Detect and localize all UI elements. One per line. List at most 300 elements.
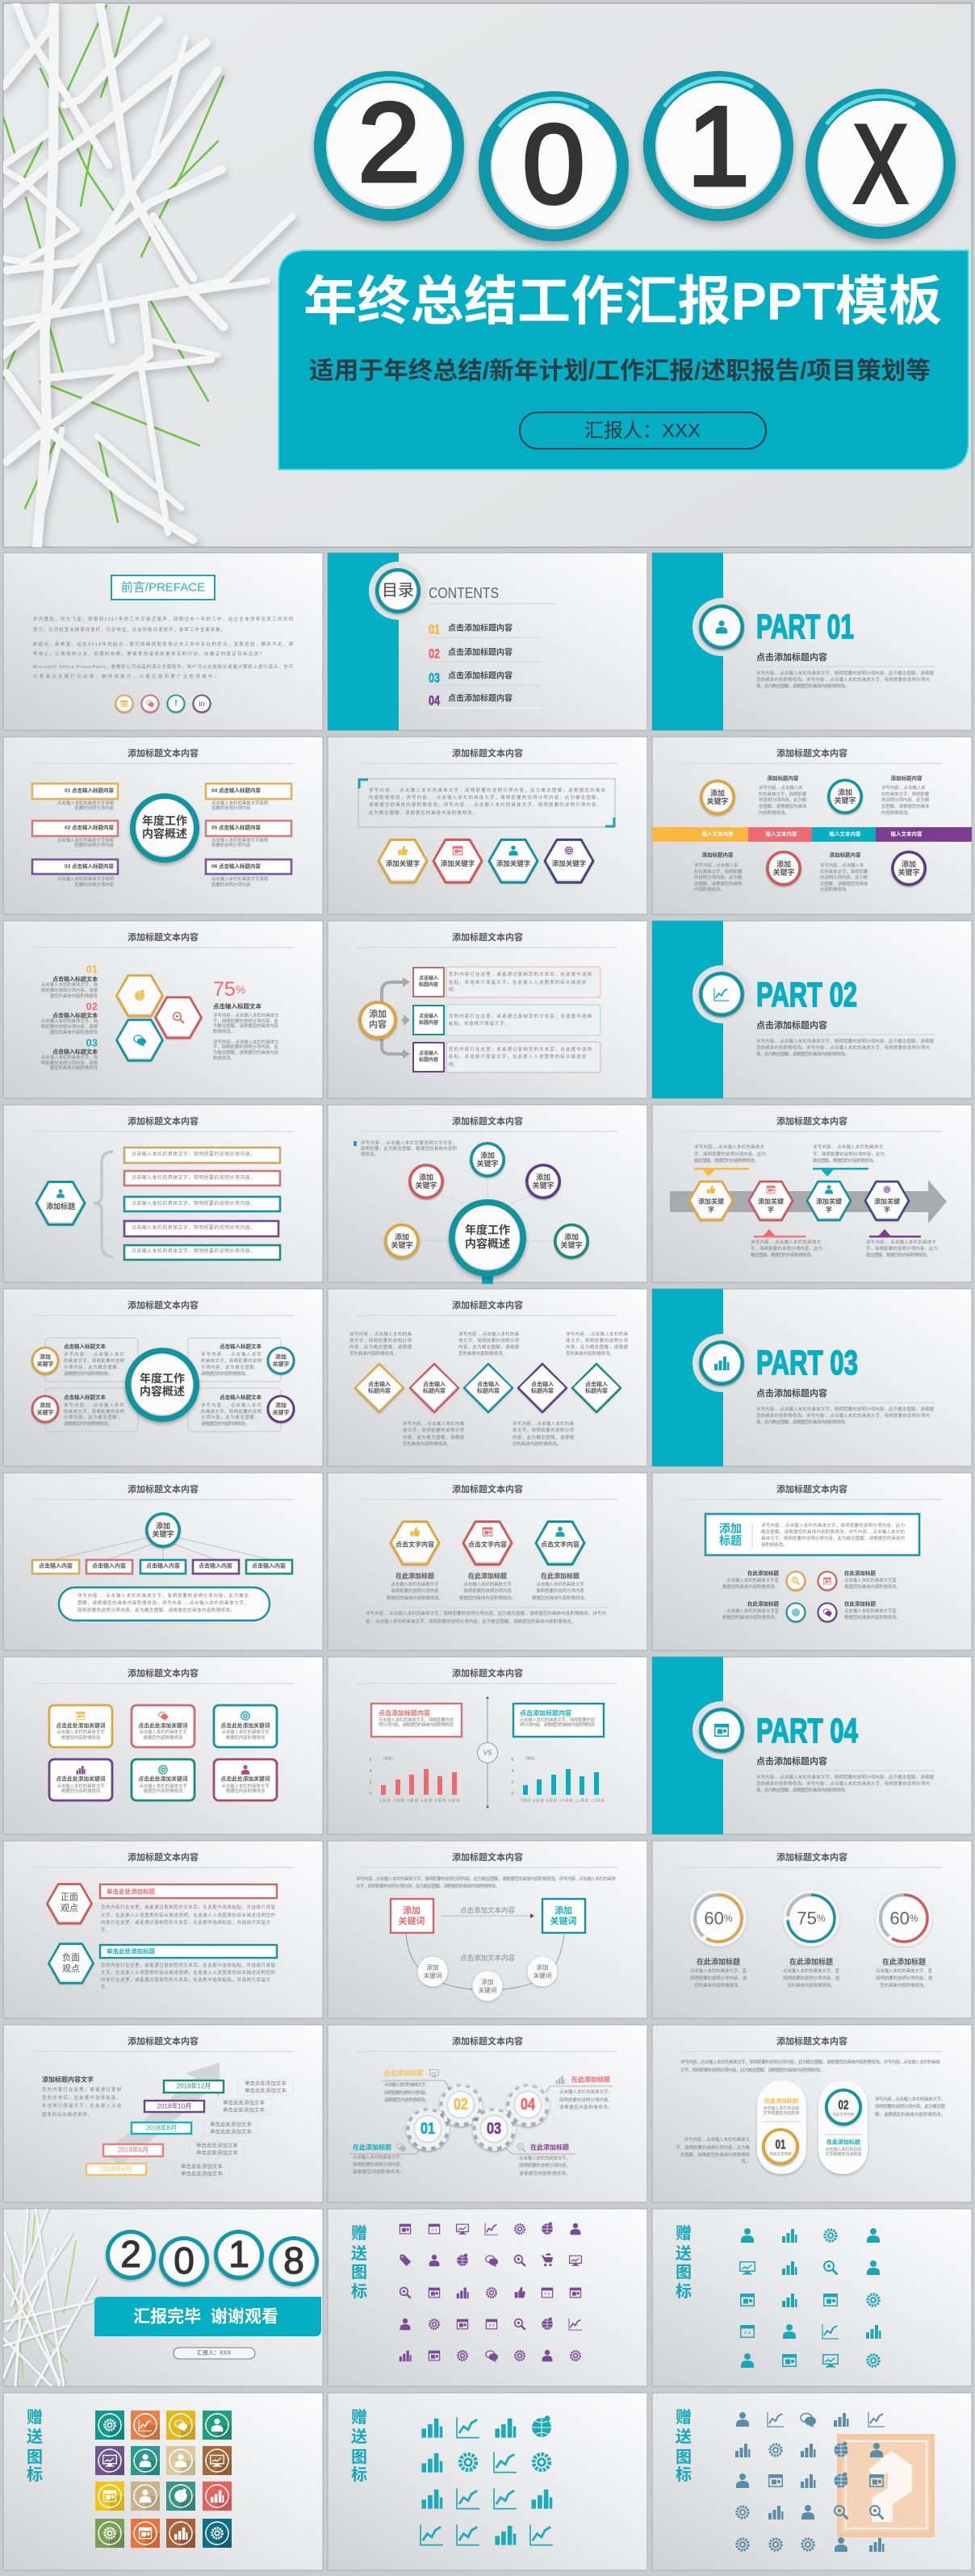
quadrant lower right: 请根据您的内容酌情修改。 [201,1420,249,1427]
part text: 详写内容....点击输入本栏的具体文字，简明扼要的说明分项内容，此为概念图解，请根据 [756,1038,935,1044]
vertical heading: 图 [676,2448,692,2466]
text column top 1: 详写内容....点击输入本 [759,784,803,791]
list row 4 [124,1221,278,1236]
hexagon keyword 3 [489,839,538,884]
diamond 5 [572,1364,621,1414]
left item 01: 扼要的说明分项内容 [74,805,115,811]
slide title: 添加标题文本内容 [128,1483,199,1495]
left item 02: 点击输入标题文本 [52,1012,98,1018]
hexagon column 2: 简明扼要的说明分项内容 [463,1587,512,1594]
top ring [145,1512,181,1549]
top text 2: 体文字，简明扼要的说明分项 [458,1337,520,1344]
hexagon keyword 4: 添加关键字 [552,859,586,868]
gauge 75 label: 在此添加标题 [789,1957,833,1966]
step 2018年10月 [144,2098,271,2114]
right bar chart: （单位） [523,1756,538,1761]
left text: 您的内容打在这里，或者通过复制 [42,2086,121,2093]
gauge red label [876,1957,933,1988]
slide: branching content boxes [328,921,647,1098]
bottom note 1 [751,1229,822,1258]
diamond 3: 标题内容 [477,1386,500,1395]
negative text [101,1962,275,1990]
band segments: 输入文本内容 [891,830,923,838]
social icons: in [199,700,205,708]
top text: 文字，简明扼要的说明分项内容，此为概念图解，请根据您的具体内容酌情修改。 [680,2067,824,2073]
slide: org tree [3,1473,323,1650]
left item 03: 点击输入标题文本 [52,1048,98,1056]
slide title: 添加标题文本内容 [452,1851,523,1863]
slide title: 添加标题文本内容 [452,2035,523,2047]
right item 05 [206,821,291,848]
left box: 点击输入本栏的具体文字，简明扼要的说 [379,1717,454,1723]
hexagon step 2: 添加关键 [758,1198,784,1206]
cycle circle left [417,1956,448,1988]
item upper right: 在此添加标题 [844,1569,877,1577]
centre ring: 年度工作 [465,1223,510,1236]
item upper left: 点击输入本栏的具体文字直 [726,1577,780,1583]
card 6: 根据您内容酌情修改 [226,1788,266,1794]
left bar chart: 1月份 2月份 3月份 4月份 5月份 6月份 [379,1798,460,1803]
centre ring [130,793,199,865]
part text: 您的具体内容酌情修改。详写内容....点击输入本栏的具体文字，简明扼要的说明分项内 [756,1412,930,1419]
callout lower right [517,2143,571,2177]
item lower left: 点击输入本栏的具体文字直 [726,1608,780,1614]
callout upper right [556,2076,613,2110]
text column top 1 [759,775,807,816]
VS axis [478,1696,497,1808]
quadrant upper right: 详写内容....点击输入本栏 [201,1351,262,1357]
negative hexagon: 观点 [62,1963,80,1974]
text pill: 图解，请根据您的具体内容酌情修改。详写内容....点击输入本栏的具体文字， [77,1600,249,1606]
framed text block [358,779,615,827]
bottom note 2: 字，简明扼要的说明分项内容，此为 [866,1245,938,1252]
band segments: 输入文本内容 [765,830,797,838]
left item 02: 点击输入本栏的具体文字，简 [41,1018,98,1024]
left item 01: 点击输入本栏的具体文字简明 [57,800,114,806]
diamond 1: 标题内容 [368,1386,391,1395]
part heading: PART 03 [756,1344,858,1382]
card 2 [132,1705,195,1747]
slide: radial keywords [328,1105,647,1284]
list row 1 [124,1148,280,1163]
vertical heading: 图 [676,2264,692,2281]
keyword top: 关键字 [476,1159,499,1168]
right keyword box: 关键词 [550,1915,576,1926]
right text: 点击输入标题文本 [213,1002,262,1010]
left item 01: 据您的具体内容酌情修改 [50,993,98,999]
keyword top [470,1142,505,1178]
vertical heading: 送 [676,2428,692,2446]
slide title: 添加标题文本内容 [452,931,523,943]
hexagon column 3: 根据您的具体内容酌情修改。 [532,1595,588,1601]
step 2018年12月 [164,2079,293,2095]
right item 06: 06 点击输入标题内容 [211,862,262,870]
tree box 4 [193,1560,239,1574]
card 4: 点击此处添加关键词 [56,1775,106,1782]
slide title: 添加标题文本内容 [452,1115,523,1127]
top text 3: 内容，此为概念图解，请根据 [566,1344,629,1350]
gear 02 [439,2085,483,2128]
right item 04: 扼要的说明分项内容 [211,805,251,811]
part text: 容，此为概念图解，请根据您的具体内容酌情修改。 [756,683,849,689]
bottom text 1: 内容，此为概念图解，请根据 [403,1434,465,1441]
row 1 [413,967,600,997]
right keyword box: 添加 [554,1905,572,1916]
hexagon keyword 2 [433,839,482,884]
item upper left [722,1569,806,1591]
digit circle 2: 2 [120,2233,141,2275]
left item 02: 02 点击输入标题内容 [65,823,114,831]
keyword lower right: 关键字 [560,1240,583,1249]
right text: 详写内容....点击输入本栏的具体文 [213,1039,279,1045]
step 2018年10月: 单击此处添加文本 [223,2098,265,2106]
right box: 点击输入本栏的具体文字，简明扼要的说 [520,1717,596,1723]
top text: 详写内容....点击输入本栏的具体文字，简明扼要的说明分项内容，此为概念图解，请根据您的具体内容酌情修改。详写内容....点击输入本栏的具体 [356,1876,617,1882]
slide: chart icons [328,2393,647,2570]
thank you banner [94,2297,321,2336]
diamond 1 [355,1364,404,1414]
right text: 详写内容....点击输入本栏的具体文 [213,1012,279,1018]
vertical heading: 赠 [351,2408,367,2427]
tree box 5 [246,1560,292,1574]
hexagon step 1 [689,1181,733,1221]
vertical heading: 送 [351,2244,367,2263]
text column top 2: 添加标题内容 [891,775,923,781]
slide: colour band timeline [652,737,972,914]
part heading: PART 04 [756,1712,858,1750]
quadrant upper right: 的具体文字，简明扼要的说明 [201,1357,262,1364]
diamond 4: 点击输入 [531,1380,554,1388]
left item 02 [41,1001,98,1035]
teal side band [652,921,723,1098]
top text 3: 您的具体内容酌情修改。 [566,1350,614,1357]
left text: 图表的综合描述说明。 [42,2111,92,2118]
gauge 75 label: 您的具体内容酌情修改。 [787,1982,835,1988]
left item 02: 明扼要的说明分项内容，请根 [41,1023,98,1030]
list row 3 [124,1197,280,1211]
part text [756,1406,935,1425]
text column bottom 2: 添加标题内容 [830,851,861,859]
bottom note 2: 概念图解，根据您的内容酌情修改。 [866,1252,931,1258]
digit circle X: X [854,102,907,225]
step 2018年8月: 2018年8月 [146,2124,177,2132]
keyword lower left: 添加 [395,1232,409,1241]
part text [756,1774,935,1793]
negative hexagon [48,1944,94,1984]
top text 3: 体文字，简明扼要的说明分项 [566,1337,629,1344]
right text: 酌情修改。 [213,1055,235,1061]
gear 04: 04 [521,2096,536,2114]
gauge red label: 在此添加标题 [882,1957,926,1966]
right pill: 在此添加标题 [826,2139,860,2145]
cycle arc [406,1933,564,1990]
quadrant lower left: 添加 [40,1401,51,1409]
left pill: 文字根据您内容酌情 [763,2110,800,2116]
keyword circle top 1 [700,780,735,816]
quadrant upper left: 的具体文字，简明扼要的说明 [64,1357,124,1364]
quadrant lower right: 的具体文字，简明扼要的说明 [201,1408,262,1415]
heading box [705,1514,919,1555]
step 2018年8月 [132,2121,258,2136]
callout lower right: 在此添加标题 [530,2143,569,2152]
left bar chart: 6 [370,1758,371,1763]
diamond 1: 点击输入 [368,1380,391,1388]
quadrant upper right: 添加 [275,1353,287,1361]
top text 1: 内容，此为概念图解，请根据 [349,1344,412,1350]
step 2018年4月: 2018年4月 [101,2164,132,2172]
list row 3: 点击输入本栏的具体文字，简明扼要的说明分项内容。 [132,1200,255,1206]
callout lower right: 点击输入本栏的具体文字， [519,2155,571,2161]
heading box: 具体文字，简明扼要的说明分项内容，此为概念图解，请根据您的具体内 [761,1535,905,1541]
right bar chart: 4 [512,1769,513,1774]
tree box 3 [140,1560,186,1574]
heading box: 添加 [719,1522,742,1535]
text column bottom 1: 栏的具体文字，简明扼要 [694,868,743,875]
slide title: 添加标题文本内容 [128,1851,199,1863]
slide: preface [3,553,323,730]
slide: VS comparison charts [328,1657,647,1834]
row 3: 您的内容打在这里，或者通过复制您的文本后，在此框中选择 [449,1046,592,1052]
positive heading box [100,1884,277,1898]
callout upper left: 在此添加标题 [384,2069,423,2077]
bottom note 1: 详写内容....点击输入本栏的具体文 [751,1239,822,1245]
branch arrows [382,977,410,1059]
quadrant upper right [201,1343,295,1377]
vertical heading [351,2224,367,2301]
framed text block: 详写内容....点击输入本栏的具体文字，简明扼要的说明分项内容，此为概念图解，请根据您的具体 [369,787,606,793]
quadrant lower right [201,1393,295,1427]
item upper right: 点击输入本栏的具体文字直 [844,1577,897,1583]
outlined boxes [45,1338,281,1432]
left item 01 [32,784,118,811]
card 1 [49,1705,112,1747]
quadrant lower left: 分项内容，此为概念图解， [64,1414,122,1420]
card 4: 根据您内容酌情修改 [61,1788,101,1794]
top text 1: 您的具体内容酌情修改。 [349,1350,398,1357]
cycle circle left: 添加 [426,1963,439,1971]
gauge 60 label [690,1957,747,1988]
top text 2: 详写内容....点击输入本栏的具 [458,1331,520,1337]
gear 03: 03 [487,2120,501,2138]
vertical heading: 送 [351,2428,367,2446]
presenter pill [174,2348,255,2359]
keyword circle top 2: 添加 [838,788,852,797]
slide: steel icons with stamp [652,2393,972,2570]
top note 1 [694,1144,766,1177]
keyword upper left [408,1164,444,1200]
quadrant lower right: 添加 [275,1401,287,1409]
hexagon column 1: 根据您的具体内容酌情修改。 [387,1595,443,1601]
slide title: 添加标题文本内容 [776,1115,847,1127]
keyword circle bottom 2: 添加 [902,859,916,868]
diamond 3 [464,1364,513,1414]
left item 01: 点击输入本栏的具体文字，简 [41,981,98,988]
right item 06 [206,859,291,888]
right text: 为概念图解，请根据您的具体内容 [213,1049,278,1056]
quadrant upper left: 点击输入标题文本 [64,1343,107,1349]
diagonal arrow [104,2063,220,2166]
callout lower left: 请根据您内容酌情修改。 [353,2168,404,2175]
right pill: 点击输入本栏的具体 [825,2147,862,2152]
card 6: 点击此处添加关键词 [220,1775,270,1782]
part subtitle: 点击添加标题内容 [756,1019,827,1031]
callout lower left: 简明扼要的说明分项内容， [353,2161,404,2168]
social icons [115,694,211,713]
badge grid [95,2411,232,2548]
top note 2 [813,1144,885,1177]
item lower left [722,1600,806,1623]
bottom text 2 [513,1420,575,1447]
teal side band [652,1657,723,1834]
slide: two pills [652,2025,972,2202]
hexagon column 1: 点击输入本栏的具体文字 [391,1581,439,1587]
grey arrow [670,1180,947,1223]
row 1: 标题内容 [419,981,438,988]
slide: stepped timeline [3,2025,323,2202]
thank you banner: 汇报完毕 谢谢观看 [133,2306,278,2326]
hexagon column 2: 在此添加标题 [468,1572,507,1580]
slide title: 添加标题文本内容 [776,1851,847,1863]
row 3: 明。 [449,1062,458,1068]
vertical heading: 标 [676,2465,692,2484]
left bar chart: （单位） [381,1756,395,1761]
hexagon column 1: 点击文字内容 [395,1540,434,1548]
chart icon grid [421,2415,553,2545]
left item 01: 点击输入标题文本 [52,975,98,983]
part subtitle: 点击添加标题内容 [756,1387,827,1399]
tree box 1: 点击输入内容 [39,1562,73,1569]
digit circle 2: 2 [358,79,421,205]
cycle circle middle: 添加 [481,1977,494,1985]
gauge 60 orange [690,1890,747,1947]
quadrant lower left: 关键字 [37,1409,53,1416]
text pill [59,1587,270,1620]
bottom text 2: 体文字，简明扼要的说明分项 [513,1427,575,1433]
left box: 点击添加标题内容 [379,1709,430,1717]
card 5: 点击此处添加关键词 [138,1775,188,1782]
part subtitle: 点击添加标题内容 [756,1755,827,1767]
step 2018年6月 [103,2142,245,2157]
callout lower right: 请根据您内容酌情修改。 [519,2170,571,2177]
centre ring: 内容概述 [142,827,187,840]
vertical heading: 赠 [676,2224,692,2243]
item upper left: 根据您的具体内容酌情修改。 [722,1583,779,1590]
main title: 年终总结工作汇报PPT模板 [303,271,942,331]
hexagon column 2: 点击输入本栏的具体文字 [463,1581,512,1587]
right keyword box [542,1899,585,1933]
right text [213,1002,279,1061]
contents ring [369,562,427,620]
negative heading box: 单击此处添加标题 [107,1947,155,1955]
slide title: 添加标题文本内容 [452,747,523,759]
part heading: PART 02 [756,976,857,1014]
framed text block: 此为概念图解，请根据您的具体内容酌情修改。 [369,809,477,816]
callout upper right: 在此添加标题 [571,2076,610,2084]
vertical heading: 送 [676,2244,692,2263]
slide title: 添加标题文本内容 [776,747,847,759]
row 2: 点击输入 [419,1013,438,1019]
right box: 点击添加标题内容 [520,1709,571,1717]
bottom text 1 [403,1420,465,1447]
callout upper left: 点击输入本栏的具体文字， [384,2081,429,2088]
callout upper left [384,2069,439,2103]
row 1: 粘贴，并选择只保留文字。在此录入上述图表的综合描述说 [449,979,587,985]
vertical heading: 赠 [676,2408,692,2427]
right bar chart: 2 [512,1780,513,1785]
step 2018年8月: 单击此处添加文本 [210,2121,252,2127]
left bar chart: 0 [370,1792,371,1796]
hexagon column 2: 点击文字内容 [468,1540,507,1548]
hexagon column 1 [387,1522,443,1601]
gauge 75 teal [783,1890,839,1947]
contents item 01 [429,621,513,638]
slide title: 添加标题文本内容 [128,1667,199,1679]
text column bottom 1: 念图解，请根据您的具体 [694,880,743,887]
text column top 2: 念图解，请根据您的具体 [881,803,930,809]
cycle label: 点击添加文本内容 [460,1954,515,1962]
keyword circle bottom 2 [891,851,927,887]
left text [42,2076,122,2118]
gear 04 [506,2085,550,2128]
framed text block: 内容酌情修改。详写内容....点击输入本栏的具体文字，简明扼要的说明分项内容，此为概念图解， [369,794,601,801]
tree box 2 [86,1560,132,1574]
top note 1: 详写内容....点击输入本栏的具体文 [694,1144,765,1150]
keyword circle top 1: 添加 [710,788,725,797]
text column top 1: 念图解，请根据您的具体 [759,803,807,809]
hexagon keyword 1: 添加关键字 [386,859,420,868]
slide: part 02 [652,921,972,1098]
contents item 02 [429,646,513,662]
hexagon column 1: 简明扼要的说明分项内容 [391,1587,439,1594]
slide: part 04 [652,1657,972,1834]
keyword circle top 2 [827,779,863,815]
left text: 并选择只保留文字。在此录入上述 [42,2102,122,2109]
positive text: 文字。在此录入上述图表的综合描述说明，在此录入上述图表的综合描述说明您的 [101,1912,275,1918]
top note 1: 字，简明扼要的说明分项内容，此为 [694,1151,766,1157]
right bar chart [512,1756,605,1803]
quadrant lower right: 详写内容....点击输入本栏 [201,1402,262,1408]
card 3: 点击输入本栏的具体文字 [221,1729,270,1735]
part text: 您的具体内容酌情修改。详写内容....点击输入本栏的具体文字，简明扼要的说明分项内 [756,1044,930,1051]
presenter pill: 汇报人：XXX [584,420,701,442]
top text 2 [458,1331,520,1357]
right text: 字，简明扼要的说明分项内容，此 [213,1018,278,1024]
callout upper left: 请根据您内容酌情修改。 [384,2097,429,2103]
tree box 5: 点击输入内容 [252,1562,286,1569]
right note [875,2096,945,2118]
card 3: 点击此处添加关键词 [220,1722,270,1729]
part text [756,1038,935,1057]
step 2018年4月 [86,2163,229,2178]
quadrant upper left [31,1343,125,1377]
left item 03 [41,1036,98,1071]
left box: 明分项内容，请根据您的具体内容酌情修改 [379,1721,454,1728]
hexagon column 3 [532,1522,588,1601]
slide: part 01 [652,553,972,730]
callout lower left: 点击输入本栏的具体文字， [353,2154,404,2160]
keyword upper left: 添加 [419,1173,433,1181]
quadrant upper right: 分项内容，此为概念图解， [201,1364,259,1370]
hexagon step 3 [807,1181,851,1221]
text column bottom 2: 念图解，请根据您的具体 [820,880,868,887]
quadrant lower right: 点击输入标题文本 [220,1393,262,1401]
item lower right: 在此添加标题 [844,1600,877,1608]
list row 5: 点击输入本栏的具体文字，简明扼要的说明分项内容。 [132,1248,255,1254]
step 2018年12月: 单击此处添加文本 [245,2087,287,2093]
hexagon step 4: 字 [884,1206,890,1214]
text column bottom 2: 内容酌情修改。 [820,886,851,893]
keyword upper right: 添加 [536,1173,550,1181]
